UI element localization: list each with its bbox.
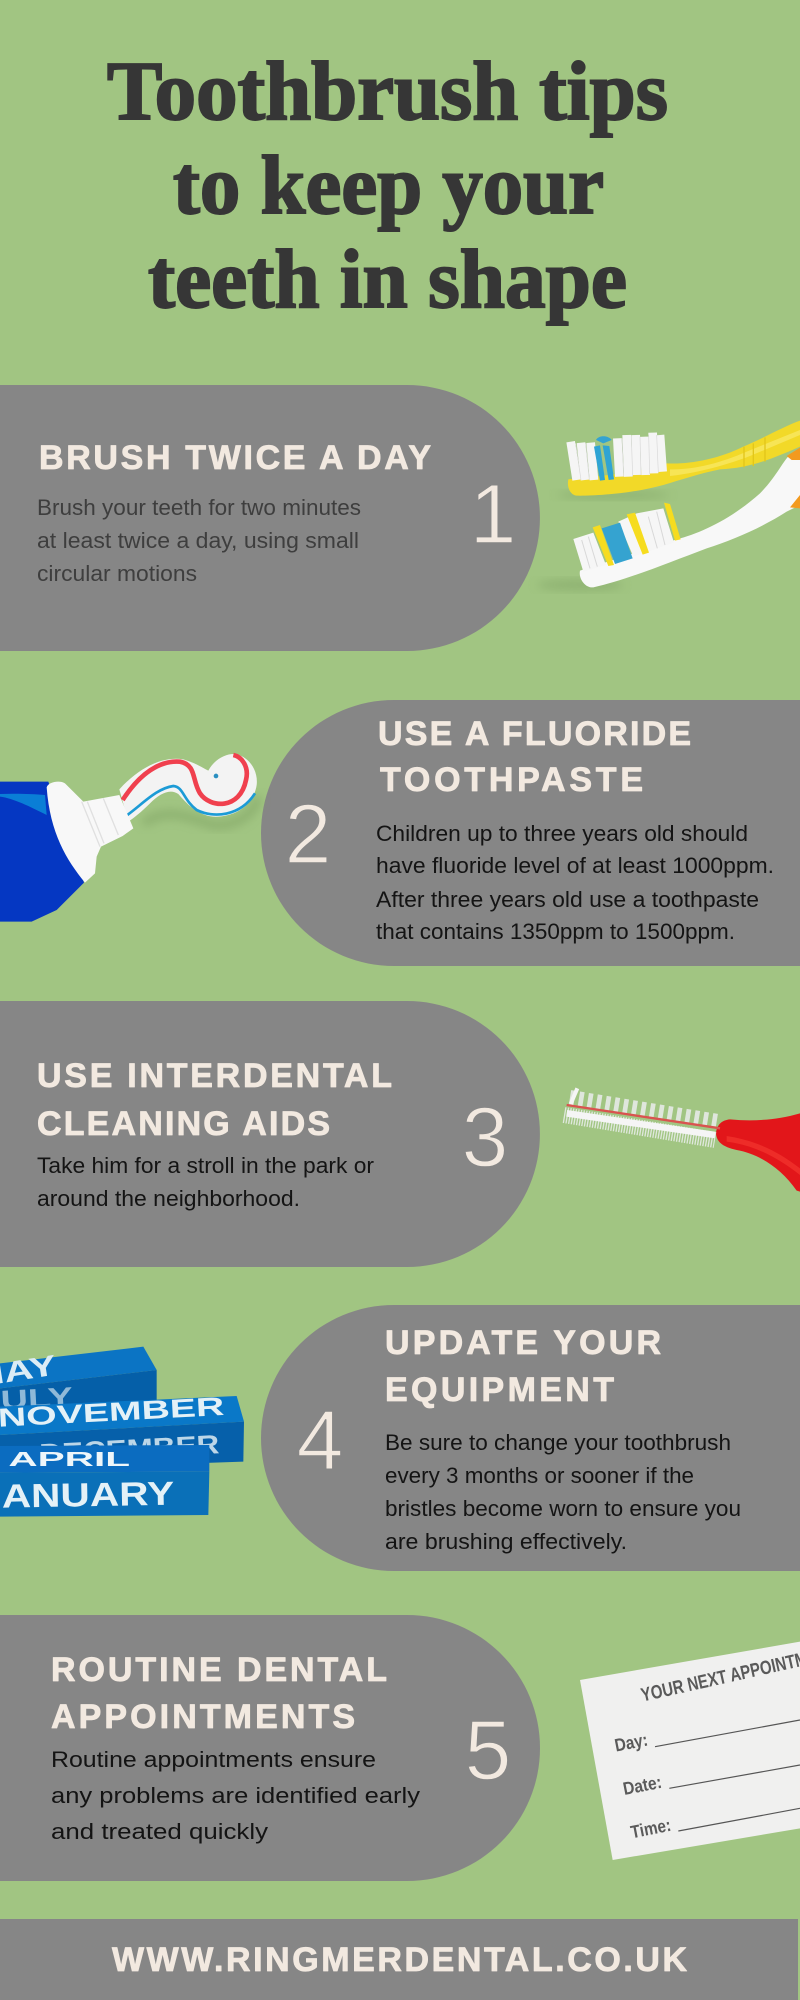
card field: time: [629, 1808, 800, 1842]
panel: update your equipment: [261, 1305, 800, 1571]
block: january: [0, 1472, 209, 1517]
icon: calendar month blocks: NOVEMBER: [0, 1391, 225, 1433]
card field: time: Time:: [629, 1815, 673, 1842]
blue stripe: [127, 786, 255, 815]
footer bar: [0, 1919, 798, 2000]
text block: interdental advice: around the neighborhood.: [37, 1186, 300, 1211]
white handle: [580, 455, 800, 587]
red handle: [716, 1113, 800, 1192]
title: Toothbrush tips: [107, 45, 668, 138]
upper bristles: [570, 1097, 720, 1122]
text block: brushing advice: Brush your teeth for two minutes: [37, 495, 361, 520]
icon: interdental brush: [564, 1088, 800, 1192]
panel: use interdental cleaning aids: [0, 1001, 540, 1267]
lower bristles: [564, 1115, 715, 1140]
icon: appointment card: [580, 1642, 800, 1860]
card field: day: Day:: [613, 1730, 649, 1756]
heading: routine dental appointments: [51, 1651, 387, 1736]
panel shape 1: [0, 385, 540, 651]
wire: [567, 1105, 720, 1128]
white cap: [47, 782, 133, 883]
number 1: 1: [470, 467, 516, 561]
yellow handle: [568, 421, 800, 496]
block: april: [0, 1445, 209, 1473]
white bristles 2: [573, 508, 674, 572]
panel shape 2: [261, 700, 800, 966]
card field: date: Date:: [621, 1772, 663, 1799]
panel shape 3: [0, 1001, 540, 1267]
blue tube: [0, 782, 84, 922]
paste: [119, 754, 257, 822]
text block: replacement advice: every 3 months or sooner if the: [385, 1463, 694, 1488]
text block: fluoride levels: have fluoride level of at least 1000ppm.: [376, 853, 774, 878]
heading: use a fluoride toothpaste: TOOTHPASTE: [380, 761, 643, 799]
blue tuft 2: [602, 523, 633, 564]
panel: brush twice a day: [0, 385, 540, 651]
text block: interdental advice: Take him for a stroll in the park or: [37, 1153, 374, 1178]
footer banner: [0, 1919, 798, 2000]
website url: WWW.RINGMERDENTAL.CO.UK: [112, 1941, 687, 1979]
panel: routine dental appointments: [0, 1615, 540, 1881]
heading: use interdental cleaning aids: [37, 1057, 392, 1143]
text block: appointment advice: and treated quickly: [51, 1819, 268, 1844]
red stripe: [123, 755, 247, 804]
icon: calendar month blocks: [0, 1347, 244, 1517]
card body: [580, 1642, 800, 1860]
heading: use interdental cleaning aids: USE INTERDENTAL: [37, 1057, 392, 1095]
text block: brushing advice: at least twice a day, using small: [37, 528, 359, 553]
heading: routine dental appointments: APPOINTMENTS: [51, 1698, 355, 1736]
heading: update your equipment: EQUIPMENT: [385, 1371, 614, 1409]
heading: routine dental appointments: ROUTINE DENTAL: [51, 1651, 387, 1689]
text block: interdental advice: [37, 1153, 374, 1211]
card field: day: [613, 1720, 800, 1756]
title: teeth in shape: [148, 233, 627, 326]
text block: brushing advice: circular motions: [37, 561, 197, 586]
text block: appointment advice: [51, 1747, 420, 1844]
text block: fluoride levels: After three years old use a toothpaste: [376, 887, 759, 912]
number 2: 2: [285, 787, 331, 881]
number 4: 4: [297, 1393, 343, 1487]
panel shape 4: [261, 1305, 800, 1571]
title: to keep your: [173, 139, 604, 232]
text block: replacement advice: are brushing effectively.: [385, 1529, 627, 1554]
heading: use interdental cleaning aids: CLEANING AIDS: [37, 1105, 330, 1143]
text block: fluoride levels: Children up to three years old should: [376, 821, 748, 846]
panel shape 5: [0, 1615, 540, 1881]
yellow strips: [593, 503, 681, 566]
text block: replacement advice: Be sure to change your toothbrush: [385, 1430, 731, 1455]
text block: fluoride levels: [376, 821, 774, 944]
panel: use a fluoride toothpaste: [261, 700, 800, 966]
icon: calendar month blocks: APRIL: [8, 1448, 130, 1471]
blue tuft: [596, 436, 612, 443]
block: november: [0, 1396, 244, 1435]
heading: brush twice a day: BRUSH TWICE A DAY: [39, 439, 431, 477]
icon: calendar month blocks: DECEMBER: [39, 1429, 220, 1469]
heading: update your equipment: [385, 1324, 661, 1409]
heading: update your equipment: UPDATE YOUR: [385, 1324, 661, 1362]
card field: date: [621, 1765, 800, 1799]
block: may: [0, 1347, 157, 1388]
text block: appointment advice: any problems are identified early: [51, 1783, 420, 1808]
icon: toothpaste tube: [0, 754, 258, 922]
text block: appointment advice: Routine appointments ensure: [51, 1747, 376, 1772]
number 5: 5: [465, 1703, 511, 1797]
white bristles: [571, 433, 663, 480]
heading: use a fluoride toothpaste: [378, 715, 691, 799]
text block: brushing advice: [37, 495, 361, 586]
text block: fluoride levels: that contains 1350ppm to 1500ppm.: [376, 919, 735, 944]
heading: use a fluoride toothpaste: USE A FLUORIDE: [378, 715, 691, 753]
icon: two toothbrushes: [537, 421, 800, 590]
title: [107, 45, 668, 326]
paste shadow: [143, 797, 258, 825]
text block: replacement advice: bristles become worn to ensure you: [385, 1496, 741, 1521]
number 3: 3: [462, 1090, 508, 1184]
text block: replacement advice: [385, 1430, 741, 1554]
